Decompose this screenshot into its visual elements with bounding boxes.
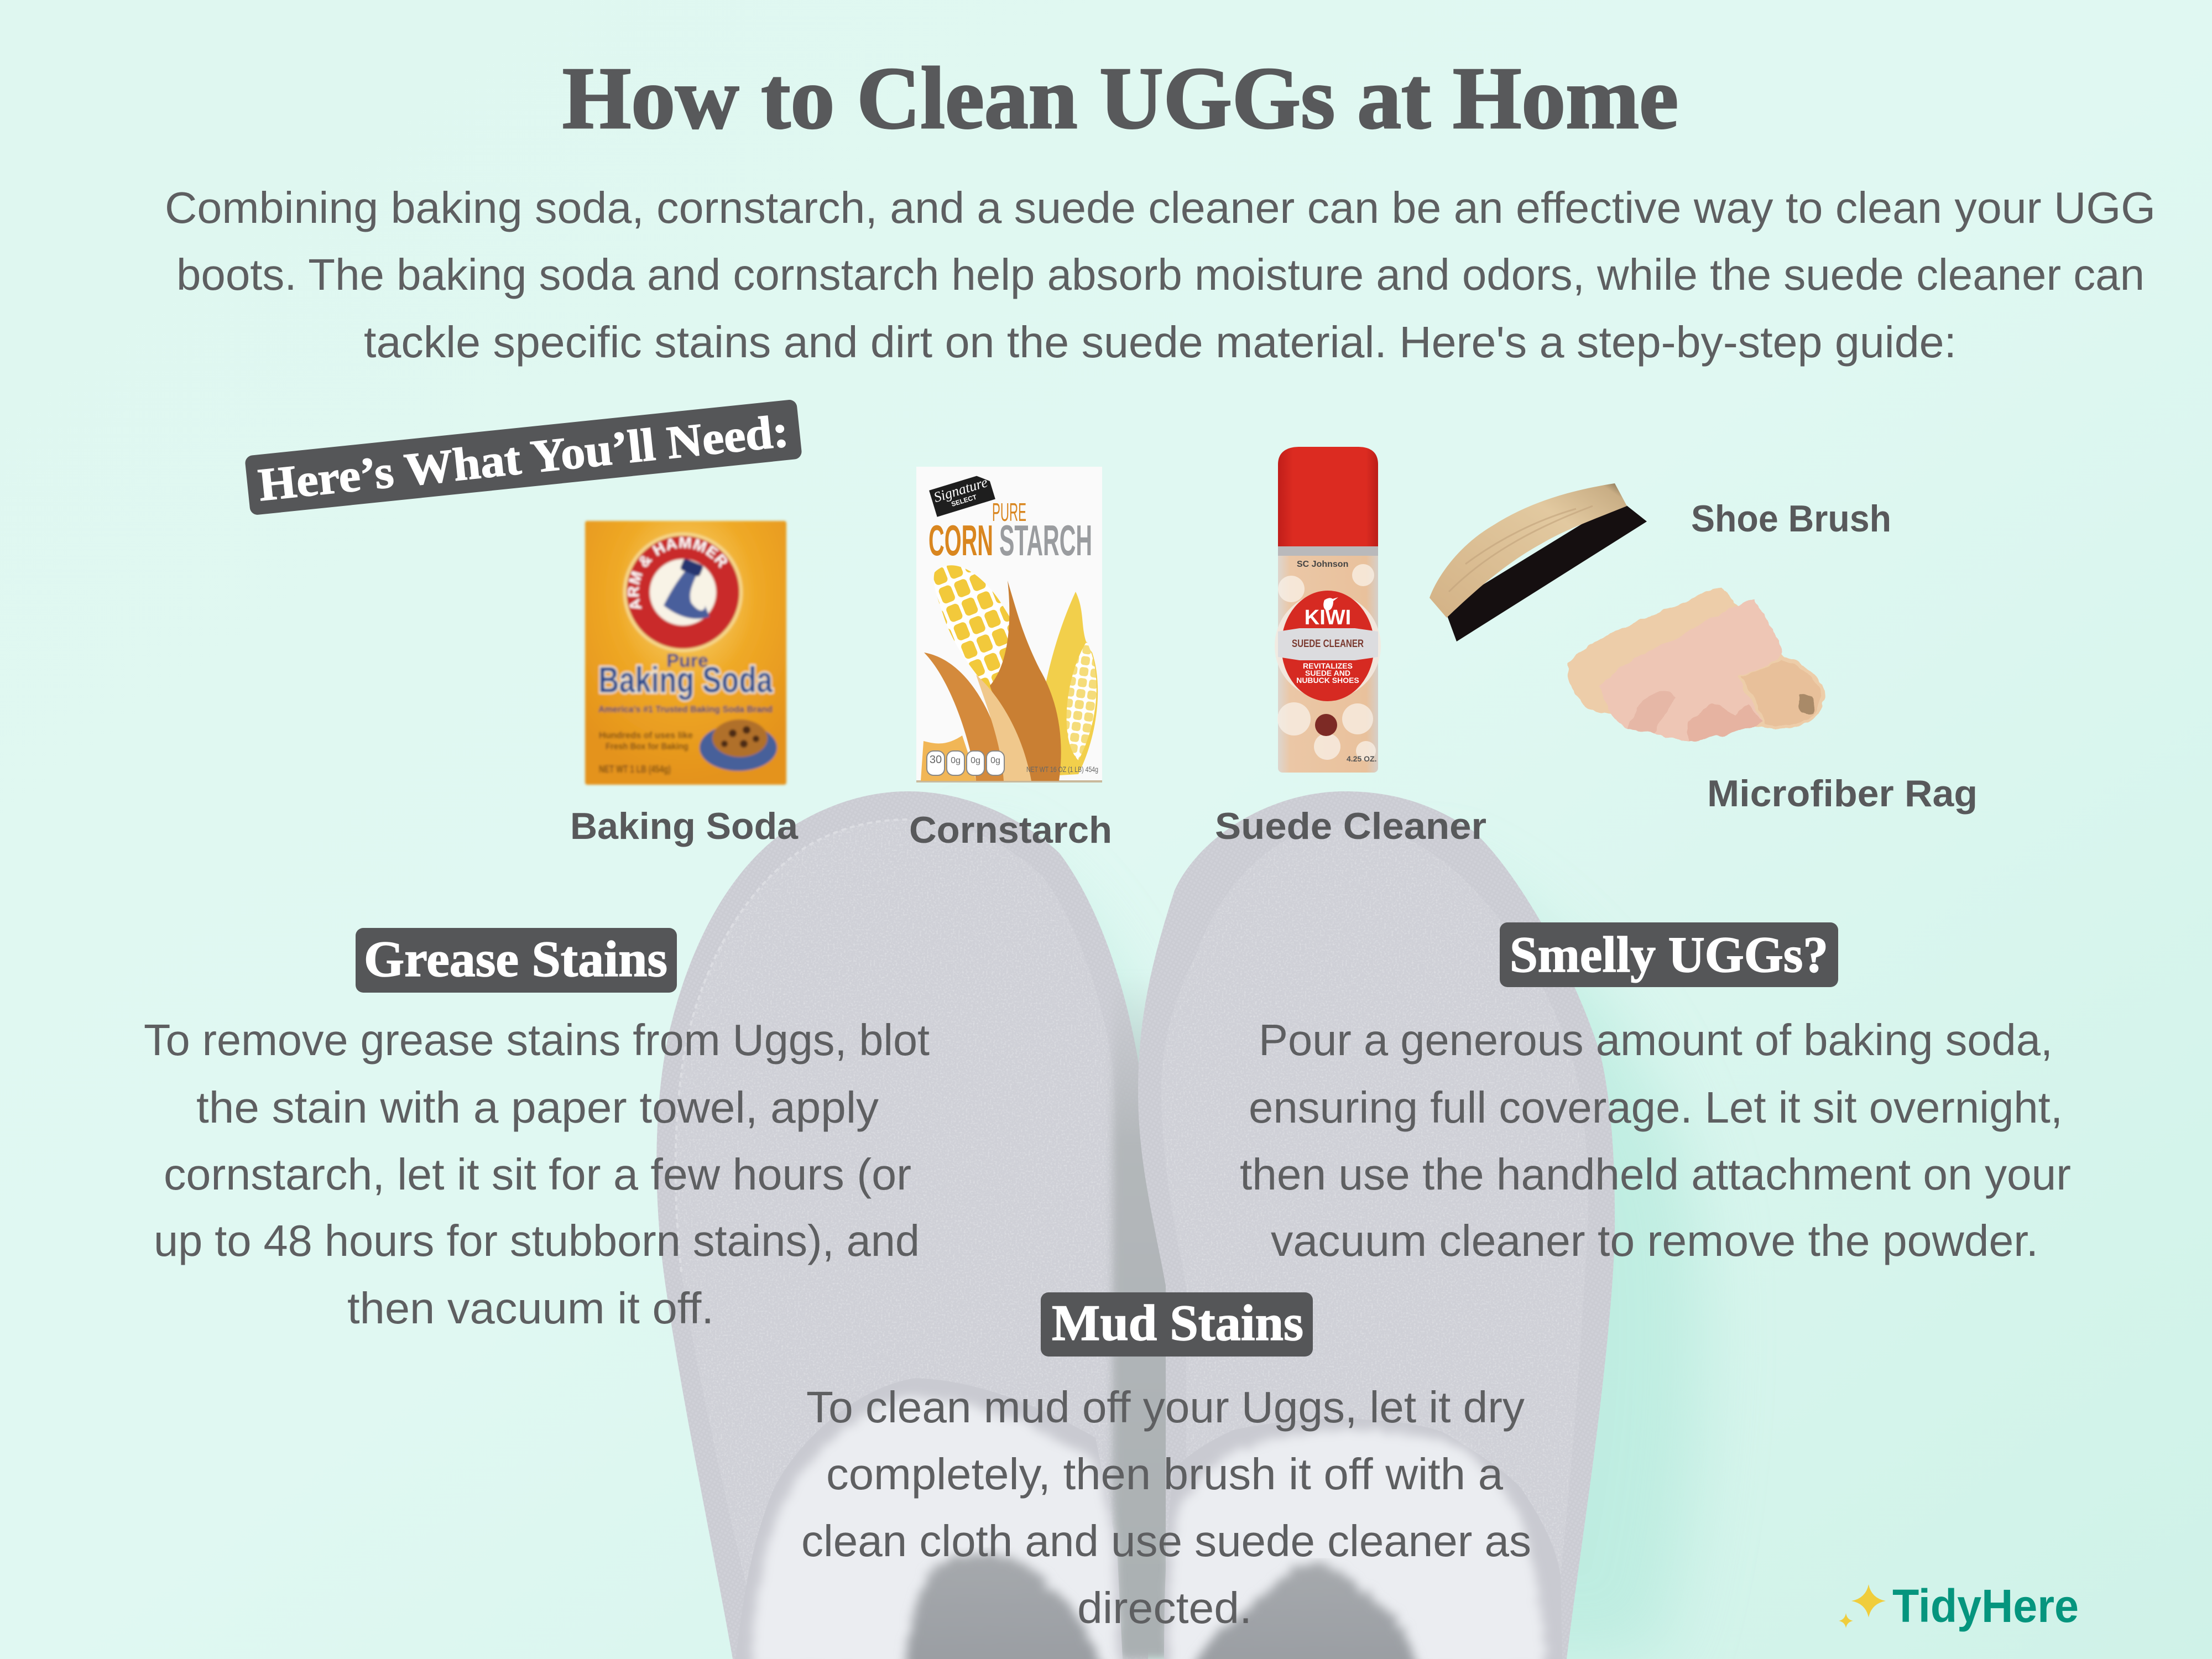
corn illustration [921,565,1098,781]
left boot fur collar [735,1378,1123,1659]
section: smelly uggs [1240,922,2071,1265]
arm and hammer seal: ARM & HAMMER [626,535,729,611]
product: baking soda box: Hundreds of uses like [599,730,693,740]
intro paragraph: tackle specific stains and dirt on the suede material. Here's a step-by-step guide: [364,317,1957,367]
section: mud stains [801,1292,1531,1632]
body text: grease stains: up to 48 hours for stubborn stains), and [154,1216,920,1265]
title: How to Clean UGGs at Home [562,49,1678,147]
body text: grease stains: the stain with a paper towel, apply [196,1083,879,1132]
cornstarch wordmark: STARCH [999,516,1092,565]
can bubbles [1277,564,1376,761]
nutrition facts: 30 [930,754,942,766]
product: baking soda box [583,519,789,787]
label: baking soda: Baking Soda [570,805,799,847]
product: kiwi suede cleaner can: NUBUCK SHOES [1296,676,1359,685]
product: kiwi suede cleaner can: SUEDE CLEANER [1292,638,1364,650]
label: cornstarch: Cornstarch [909,809,1112,851]
body text: grease stains: cornstarch, let it sit for a few hours (or [164,1150,911,1199]
arm and hammer seal [622,531,744,654]
soft boot shadow [968,841,1703,1659]
body text: mud stains: directed. [1077,1583,1252,1632]
cornstarch wordmark [928,498,1092,565]
body text: mud stains: completely, then brush it off with a [826,1449,1504,1499]
product: baking soda box: Baking Soda [598,659,773,700]
label: shoe brush: Shoe Brush [1691,498,1891,540]
product: kiwi suede cleaner can: SUEDE AND [1305,669,1350,677]
body text: mud stains [801,1383,1531,1632]
body text: smelly uggs [1240,1015,2071,1265]
body text: smelly uggs: Pour a generous amount of baking soda, [1259,1015,2053,1065]
label: suede cleaner: Suede Cleaner [1215,805,1486,847]
intro paragraph: Combining baking soda, cornstarch, and a suede cleaner can be an effective way to clean your UGG [165,183,2156,232]
boots photograph [656,791,1703,1659]
cornstarch wordmark: CORN [928,516,993,565]
brand tag [929,473,995,517]
body text: grease stains [144,1015,930,1333]
body text: mud stains: To clean mud off your Uggs, let it dry [806,1383,1525,1432]
right boot [1138,791,1615,1659]
nutrition facts: 0g [971,756,980,765]
product: cornstarch box [916,467,1102,782]
cookies on plate [700,719,777,771]
body text: smelly uggs: vacuum cleaner to remove the powder. [1271,1216,2038,1265]
cornstarch wordmark: PURE [992,498,1026,526]
product: kiwi suede cleaner can: KIWI [1305,606,1351,629]
nutrition facts: 0g [951,756,961,765]
body text: grease stains: then vacuum it off. [347,1284,714,1333]
icon: sparkles [1839,1584,1886,1628]
heading chip: grease stains: Grease Stains [364,931,667,987]
right boot fur collar [1164,1419,1562,1659]
nutrition facts [927,751,1098,775]
heading chip: smelly uggs: Smelly UGGs? [1510,926,1828,983]
red kiwi badge [1281,591,1374,701]
intro paragraph [165,183,2156,367]
product: baking soda box: Fresh Box for Baking [606,741,688,752]
brand tag: SELECT [950,493,978,508]
body text: grease stains: To remove grease stains from Uggs, blot [144,1015,930,1065]
product: kiwi suede cleaner can [1275,447,1381,773]
product: kiwi suede cleaner can: 4.25 OZ. [1347,754,1376,763]
product: baking soda box: America’s #1 Trusted Baking Soda Brand [598,704,773,714]
product: microfiber rags [1567,587,1825,742]
nutrition facts: NET WT 16 OZ (1 LB) 454g [1026,765,1098,774]
body text: smelly uggs: then use the handheld attachment on your [1240,1150,2071,1199]
product: kiwi suede cleaner can: REVITALIZES [1303,661,1353,670]
section: grease stains [144,928,930,1333]
logo: TidyHere: TidyHere [1892,1580,2079,1632]
product: baking soda box: Pure [666,650,708,671]
intro paragraph: boots. The baking soda and cornstarch help absorb moisture and odors, while the suede cleaner can [176,250,2145,299]
heading: Here's What You'll Need: Here’s What You’ll Need: [256,405,791,511]
left boot [656,791,1148,1659]
nutrition facts: 0g [990,756,1000,765]
gap shadow between boots [1113,973,1176,1659]
heading chip: mud stains: Mud Stains [1052,1295,1303,1351]
body text: mud stains: clean cloth and use suede cleaner as [801,1516,1531,1566]
body text: smelly uggs: ensuring full coverage. Let it sit overnight, [1249,1083,2063,1132]
product: kiwi suede cleaner can: SC Johnson [1297,560,1348,569]
label: microfiber rag: Microfiber Rag [1707,773,1978,815]
brand tag: Signature [932,474,989,505]
product: shoe brush [1430,483,1647,641]
product: baking soda box: NET WT 1 LB (454g) [599,764,671,775]
